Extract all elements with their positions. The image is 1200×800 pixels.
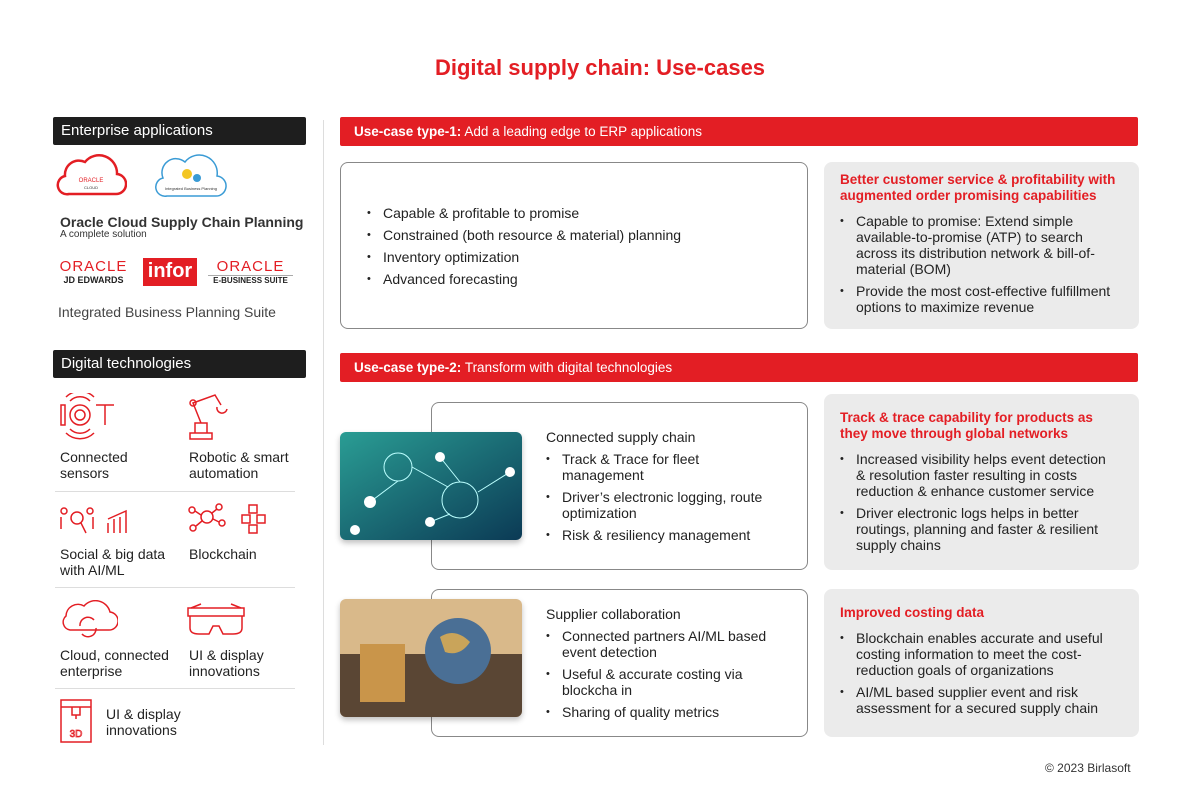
logo: sap ibp: Integrated Business Planning bbox=[165, 186, 217, 191]
panel: erp capabilities: Inventory optimization bbox=[383, 249, 519, 265]
logo: oracle jd edwards: ORACLE bbox=[60, 258, 127, 275]
panel: better customer service: Provide the most cost-effective fulfillment options to maximize revenue bbox=[856, 283, 1110, 315]
label: connected sensors: sensors bbox=[60, 465, 109, 481]
logo: oracle e-business suite bbox=[208, 258, 293, 285]
label: blockchain: Blockchain bbox=[189, 546, 257, 562]
logo: oracle cloud supply chain planning: Oracle Cloud Supply Chain Planning bbox=[60, 214, 303, 230]
panel: track & trace: Increased visibility helps event detection & resolution faster resulting in costs reduction & enhance customer service bbox=[856, 451, 1106, 499]
label: connected sensors: Connected bbox=[60, 449, 128, 465]
icon: 3d printer: 3D bbox=[70, 729, 82, 740]
label: ui & display innovations 2: UI & display bbox=[106, 706, 181, 722]
bar: use-case type 1 bbox=[340, 117, 1138, 146]
logo: oracle jd edwards bbox=[60, 258, 127, 285]
header: enterprise applications bbox=[53, 117, 306, 145]
panel: supplier collaboration: Useful & accurate costing via blockcha in bbox=[562, 666, 743, 698]
panel: improved costing data bbox=[824, 589, 1139, 737]
label: cloud connected enterprise bbox=[60, 647, 169, 679]
panel: better customer service: Better customer service & profitability with augmented order promising capabilities bbox=[840, 172, 1115, 203]
bar: use-case type 2: Use-case type-2: Transform with digital technologies bbox=[354, 360, 672, 375]
header: digital technologies bbox=[53, 350, 306, 378]
panel: improved costing data: AI/ML based supplier event and risk assessment for a secured supply chain bbox=[856, 684, 1098, 716]
panel: erp capabilities: Capable & profitable to promise bbox=[383, 205, 579, 221]
icon: robotic arm bbox=[189, 394, 228, 440]
logo: infor bbox=[143, 258, 197, 286]
panel: connected supply chain: Driver’s electronic logging, route optimization bbox=[562, 489, 762, 521]
panel: supplier collaboration: Connected partners AI/ML based event detection bbox=[562, 628, 766, 660]
panel: track & trace: Driver electronic logs helps in better routings, planning and faster & resilient supply chains bbox=[856, 505, 1098, 553]
icon: iot bbox=[60, 393, 114, 440]
icon: cloud connected bbox=[62, 600, 118, 638]
panel: track & trace: Track & trace capability for products as they move through global networks bbox=[840, 410, 1093, 441]
header: digital technologies: Digital technologies bbox=[61, 355, 191, 372]
label: ui & display innovations bbox=[189, 647, 264, 679]
label: social & big data: Social & big data bbox=[60, 546, 165, 562]
panel: track & trace bbox=[824, 394, 1139, 570]
bar: use-case type 1: Use-case type-1: Add a leading edge to ERP applications bbox=[354, 124, 702, 139]
logo: integrated business planning suite: Integrated Business Planning Suite bbox=[58, 304, 276, 320]
label: ui & display innovations 2: innovations bbox=[106, 722, 177, 738]
panel: connected supply chain: Track & Trace for fleet management bbox=[562, 451, 699, 483]
label: cloud connected enterprise: Cloud, connected bbox=[60, 647, 169, 663]
label: cloud connected enterprise: enterprise bbox=[60, 663, 122, 679]
icon: 3d printer bbox=[60, 699, 92, 743]
bar: use-case type 2 bbox=[340, 353, 1138, 382]
logo: infor: infor bbox=[148, 260, 192, 282]
logo: oracle e-business suite: ORACLE bbox=[217, 258, 284, 275]
logo: oracle e-business suite: E-BUSINESS SUITE bbox=[213, 276, 288, 285]
icon: ar glasses bbox=[187, 603, 245, 635]
title: Digital supply chain: Use-cases bbox=[435, 55, 765, 80]
label: connected sensors bbox=[60, 449, 128, 481]
logo: oracle cloud: ORACLE bbox=[79, 178, 103, 184]
label: robotic & smart automation bbox=[189, 449, 289, 481]
logo: oracle cloud bbox=[56, 154, 127, 196]
image: globe and container bbox=[340, 599, 522, 717]
copyright: © 2023 Birlasoft bbox=[1045, 761, 1131, 775]
panel: erp capabilities: Advanced forecasting bbox=[383, 271, 518, 287]
logo: sap ibp bbox=[155, 154, 227, 197]
panel: connected supply chain bbox=[431, 402, 808, 570]
icon: social & big data bbox=[60, 507, 127, 534]
label: ui & display innovations 2 bbox=[106, 706, 181, 738]
label: ui & display innovations: innovations bbox=[189, 663, 260, 679]
logos: enterprise applications bbox=[56, 154, 303, 320]
panel: supplier collaboration: Sharing of quality metrics bbox=[562, 704, 719, 720]
panel: improved costing data: Improved costing data bbox=[840, 605, 984, 620]
label: social & big data bbox=[60, 546, 166, 578]
panel: supplier collaboration bbox=[431, 589, 808, 737]
label: robotic & smart automation: Robotic & smart bbox=[189, 449, 289, 465]
label: ui & display innovations: UI & display bbox=[189, 647, 264, 663]
panel: connected supply chain: Risk & resiliency management bbox=[562, 527, 750, 543]
header: enterprise applications: Enterprise applications bbox=[61, 122, 213, 139]
logo: oracle cloud: CLOUD bbox=[84, 185, 98, 190]
logo: oracle cloud supply chain planning bbox=[60, 214, 303, 240]
panel: better customer service: Capable to promise: Extend simple available-to-promise (ATP) to search across its distribution network & bill-of-material (BOM) bbox=[856, 213, 1095, 277]
logo: oracle jd edwards: JD EDWARDS bbox=[63, 275, 124, 285]
label: robotic & smart automation: automation bbox=[189, 465, 258, 481]
panel: erp capabilities bbox=[340, 162, 808, 329]
panel: erp capabilities: Constrained (both resource & material) planning bbox=[383, 227, 681, 243]
icon: blockchain bbox=[188, 503, 266, 534]
panel: connected supply chain: Connected supply chain bbox=[546, 429, 695, 445]
logo: oracle cloud supply chain planning: A complete solution bbox=[60, 229, 147, 240]
grid: digital technologies bbox=[55, 393, 295, 743]
panel: better customer service bbox=[824, 162, 1139, 329]
image: connected network bbox=[340, 432, 522, 540]
label: social & big data: with AI/ML bbox=[60, 562, 125, 578]
panel: supplier collaboration: Supplier collaboration bbox=[546, 606, 681, 622]
panel: improved costing data: Blockchain enables accurate and useful costing information to meet the cost-reduction goals of organizations bbox=[856, 630, 1103, 678]
